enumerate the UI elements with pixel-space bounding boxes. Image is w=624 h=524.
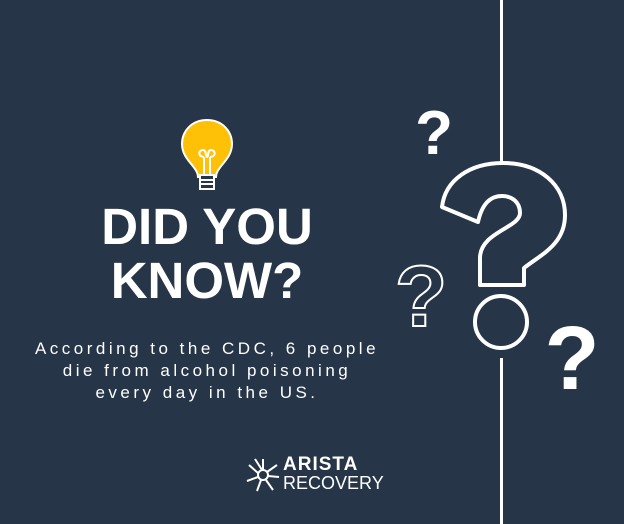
body text: every day in the US. (95, 383, 319, 402)
title: KNOW? (111, 252, 303, 309)
title: DID YOU (101, 198, 313, 255)
divider line (500, 0, 503, 524)
logo: Arista Recovery: ARISTA (283, 454, 358, 475)
logo: Arista Recovery: RECOVERY (283, 473, 384, 493)
big outline question mark (442, 162, 565, 358)
title (101, 198, 313, 309)
small filled question marks: ? (415, 99, 453, 168)
body text (35, 339, 379, 402)
question marks: ? (545, 309, 599, 409)
logo: Arista Recovery (246, 454, 384, 493)
small outline question mark: ? (395, 249, 447, 345)
icon: light bulb (181, 119, 233, 190)
body text: die from alcohol poisoning (63, 361, 351, 380)
body text: According to the CDC, 6 people (35, 339, 379, 358)
